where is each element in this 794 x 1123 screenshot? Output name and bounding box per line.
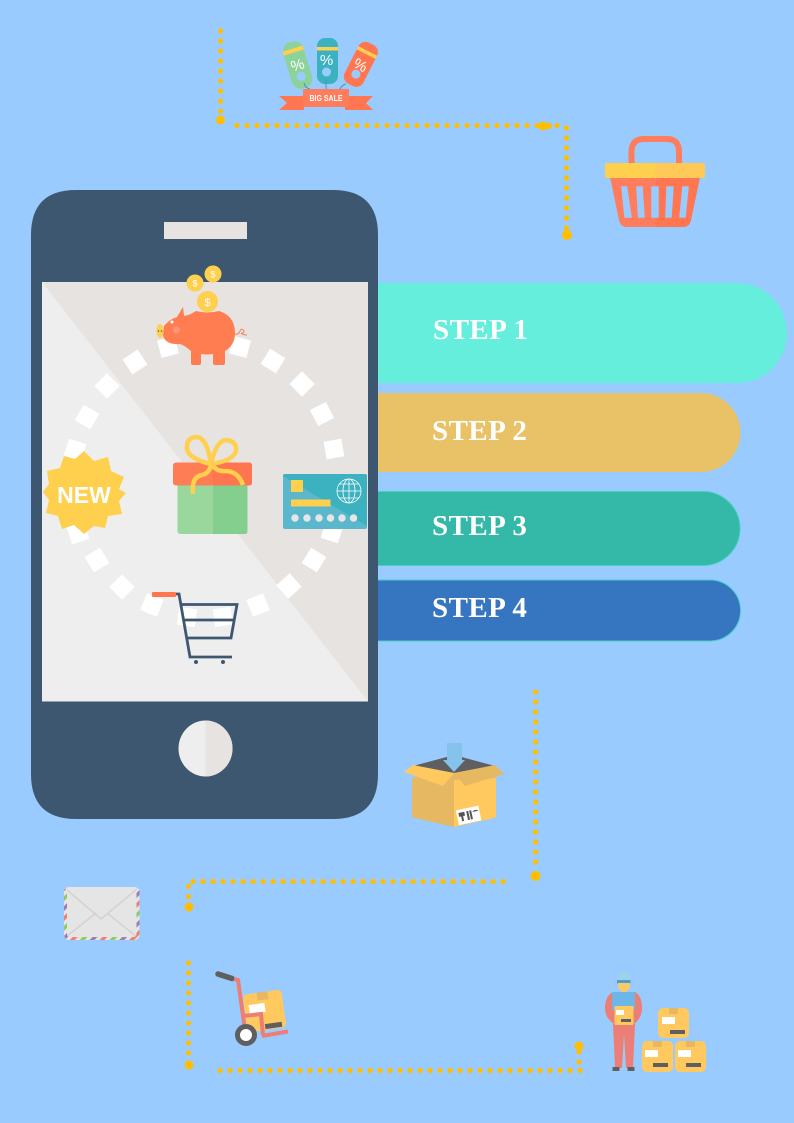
icon: big sale tags: %: [289, 55, 307, 76]
icon: credit card: [283, 474, 367, 529]
icon: delivery worker with parcels: [605, 972, 706, 1072]
worker: [605, 972, 642, 1071]
icon: big sale tags: [279, 38, 381, 110]
step 4 bar: STEP 4: [432, 592, 527, 624]
phone screen: [42, 282, 368, 702]
arrow: dotted path from box to envelope: [184, 692, 540, 912]
step 2 bar: STEP 2: [432, 415, 527, 447]
icon: hand truck with parcel: [218, 974, 288, 1044]
step 4 bar: [370, 580, 740, 641]
step 1 bar: STEP 1: [433, 314, 528, 346]
icon: big sale tags: %: [350, 55, 370, 76]
icon: big sale tags: BIG SALE: [310, 94, 343, 103]
icon: airmail envelope: [64, 887, 140, 940]
arrow: dotted path from envelope to delivery worker: [184, 963, 584, 1070]
step 1 bar: [370, 283, 787, 383]
icon: new badge: [43, 451, 126, 534]
icon: new badge: NEW: [57, 482, 111, 508]
white dashed ring: [64, 336, 344, 627]
arrow: dotted path from sale tags to basket: [216, 31, 572, 240]
icon: piggy bank with coins: $: [210, 270, 216, 280]
phone speaker: [164, 222, 247, 239]
parcels: [642, 1008, 706, 1072]
icon: piggy bank with coins: $: [192, 278, 198, 288]
step 2 bar: [370, 393, 740, 472]
icon: piggy bank with coins: [156, 266, 247, 365]
icon: shopping basket: [605, 139, 705, 227]
step 3 bar: STEP 3: [432, 510, 527, 542]
phone: [31, 190, 378, 819]
icon: open cardboard box: [404, 743, 504, 827]
step 3 bar: [370, 492, 740, 566]
icon: piggy bank with coins: $: [204, 297, 211, 309]
icon: gift box: [173, 437, 252, 534]
phone home button: [178, 720, 232, 776]
icon: shopping cart: [152, 592, 237, 664]
icon: big sale tags: %: [320, 52, 333, 69]
